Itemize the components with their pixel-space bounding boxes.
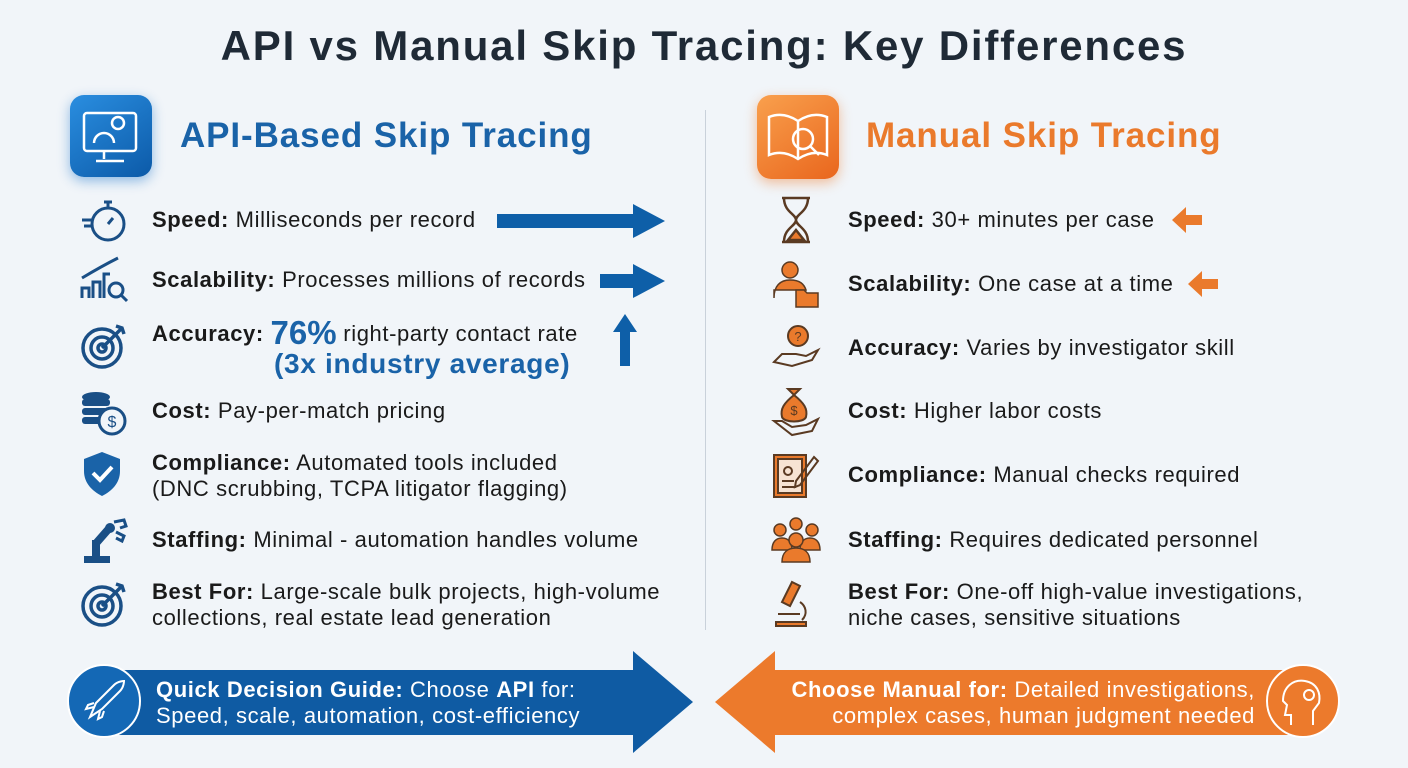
panel: Manual [749,91,1303,630]
arrow: up [613,314,637,366]
arrow: left small [1188,271,1218,297]
callout: API decision guide [67,651,693,753]
icon: API monitor [70,95,152,177]
icon: coins: $ [108,414,117,431]
row: accuracy [772,325,1235,367]
icon: coins [82,392,126,436]
row: compliance [773,454,1240,498]
callout: Manual decision guide [715,651,1340,753]
row: speed: Speed: Milliseconds per record [152,207,476,232]
row: staffing [771,517,1258,563]
icon: hand question [772,325,821,367]
arrow: scalability [600,264,665,298]
row: scalability [773,261,1218,308]
row: cost [771,388,1102,436]
row: best for [81,579,660,630]
row: speed [82,200,665,242]
title: API vs Manual Skip Tracing: Key Differences [221,22,1187,69]
row: scalability [80,256,665,302]
icon: money bag [771,388,820,436]
callout: Manual decision guide: complex cases, human judgment needed [832,703,1255,728]
row: best for: niche cases, sensitive situations [848,605,1181,630]
icon: person folder [773,261,819,308]
row: compliance: Compliance: Automated tools included [152,450,558,475]
row: scalability: Scalability: Processes millions of records [152,267,586,292]
icon: target [81,324,126,369]
row: best for [775,579,1303,630]
callout: API decision guide: Quick Decision Guide: Choose API for: [156,677,576,702]
callout: Manual decision guide: Choose Manual for: Detailed investigations, [792,677,1255,702]
arrow: left small [1172,207,1202,233]
row: speed: Speed: 30+ minutes per case [848,207,1155,232]
row: staffing: Staffing: Minimal - automation handles volume [152,527,639,552]
row: best for: Best For: Large-scale bulk projects, high-volume [152,579,660,604]
row: cost: Cost: Higher labor costs [848,398,1102,423]
icon: money bag: $ [790,403,798,418]
row: best for: collections, real estate lead generation [152,605,551,630]
icon: clipboard [773,454,820,498]
row: cost [82,392,446,436]
row: compliance [84,450,568,501]
icon: book magnifier [757,95,839,179]
callout: API decision guide: Speed, scale, automation, cost-efficiency [156,703,580,728]
row: staffing [84,518,639,563]
icon: group [771,517,821,563]
row: accuracy: Accuracy: 76% right-party contact rate [152,314,578,351]
icon: microscope [775,580,807,627]
row: cost: Cost: Pay-per-match pricing [152,398,446,423]
divider [705,110,706,630]
row: accuracy: (3x industry average) [274,348,570,379]
row: compliance: Compliance: Manual checks required [848,462,1240,487]
icon: stopwatch [82,200,126,242]
row: staffing: Staffing: Requires dedicated personnel [848,527,1258,552]
icon: hand question: ? [794,329,802,344]
row: accuracy [81,314,637,379]
heading: Manual Skip Tracing: Manual Skip Tracing [866,116,1222,155]
row: speed [782,196,1202,244]
row: scalability: Scalability: One case at a time [848,271,1174,296]
icon: shield [84,452,120,496]
heading: API-Based Skip Tracing: API-Based Skip Tracing [180,116,593,155]
row: compliance: (DNC scrubbing, TCPA litigator flagging) [152,476,568,501]
icon: robot arm [84,518,128,563]
icon: target [81,582,126,627]
icon: hourglass [782,196,810,244]
row: accuracy: Accuracy: Varies by investigator skill [848,335,1235,360]
panel: API-based [62,90,665,630]
icon: chart magnifier [80,256,128,302]
arrow: speed [497,204,665,238]
row: best for: Best For: One-off high-value investigations, [848,579,1303,604]
